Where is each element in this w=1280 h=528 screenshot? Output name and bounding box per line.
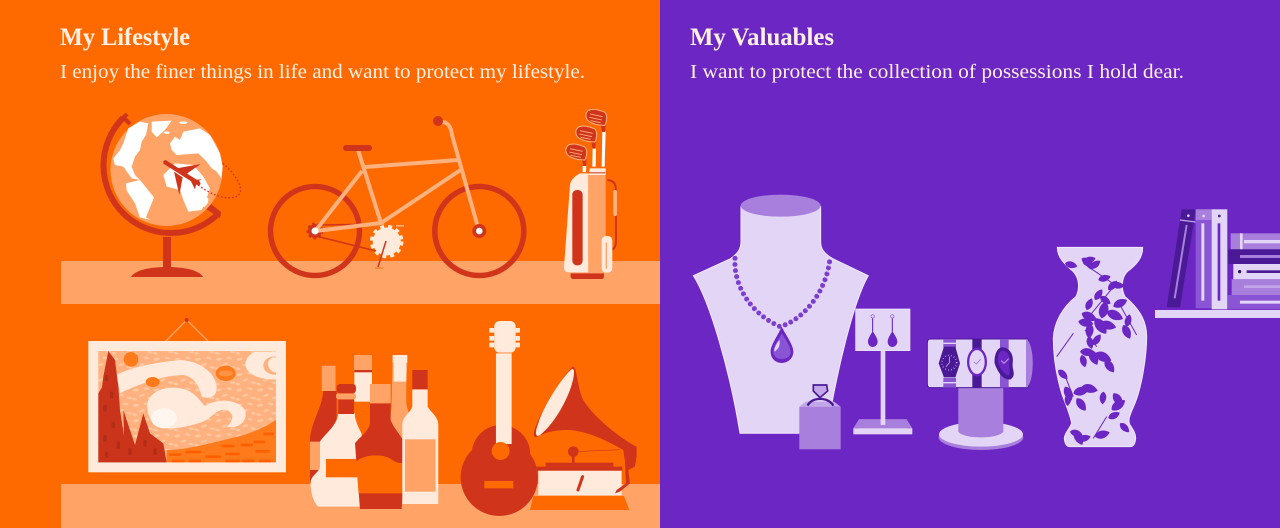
icon: golf bag (564, 109, 617, 279)
bottle: clear front right (402, 389, 438, 504)
bust, ring and earrings (693, 195, 912, 449)
panel: my lifestyle (0, 0, 660, 528)
icon: ring box (799, 385, 841, 449)
icon: books on shelf (1155, 209, 1280, 318)
text block: valuables description: I want to protect the collection of possessions I hold dear. (690, 61, 1184, 83)
bottle: dark wine (310, 366, 337, 443)
icon: bicycle (270, 116, 524, 276)
panel: my valuables (660, 0, 1280, 528)
bottle: cream front with label (311, 413, 362, 507)
icon: necklace bust (693, 195, 868, 433)
icon: floral vase (1053, 247, 1147, 447)
bottle: back slim (390, 355, 413, 440)
icon: bottles (310, 355, 438, 509)
watch: melted (995, 339, 1014, 388)
painting with bottles, guitar and gramophone (88, 318, 637, 516)
icon: starry night painting (88, 318, 286, 472)
icon: earring display (853, 309, 912, 434)
lower shelf (61, 484, 660, 528)
icon: watch stand (927, 339, 1033, 450)
watch: oval (967, 339, 987, 388)
heading: my lifestyle: My Lifestyle (60, 24, 190, 51)
bottle: central dark (355, 403, 406, 509)
icon: gramophone (530, 367, 637, 510)
vase and bookshelf (1053, 209, 1280, 447)
text block: lifestyle description: I enjoy the finer things in life and want to protect my lifestyle. (60, 61, 585, 83)
bottle: tall cream (354, 355, 372, 402)
icon: globe (103, 114, 241, 277)
icon: guitar (461, 321, 538, 516)
watch: steel (939, 339, 960, 388)
heading: my valuables: My Valuables (690, 24, 834, 51)
upper shelf (61, 261, 660, 304)
